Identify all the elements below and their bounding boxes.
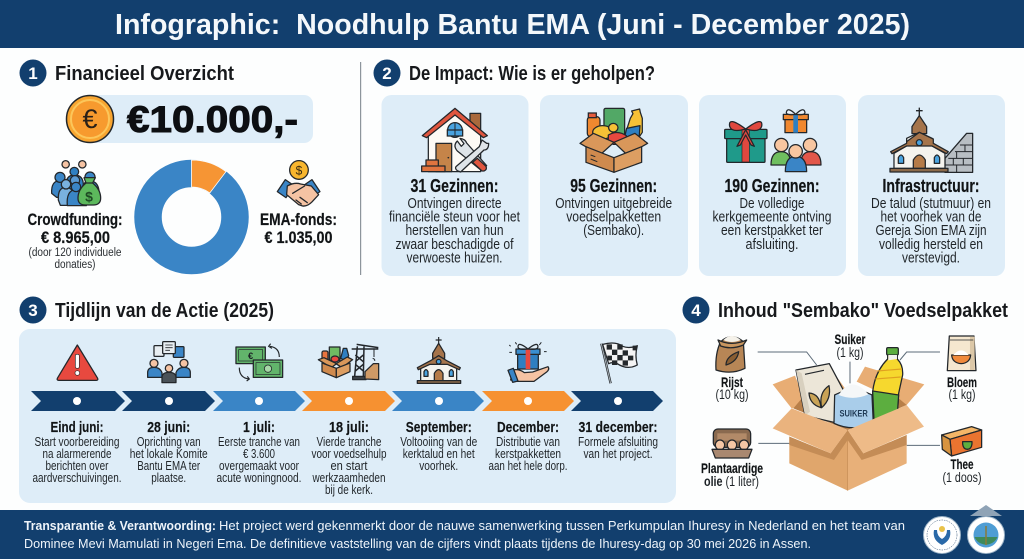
step: 28 juni: Bantu EMA ter xyxy=(137,458,201,473)
icon: food box and crane xyxy=(318,344,379,380)
item labels: olie (1 liter) xyxy=(704,473,759,489)
card text: Infrastructuur: xyxy=(882,176,980,196)
step: september xyxy=(400,419,477,473)
crowdfunding text: (door 120 individuele xyxy=(28,247,122,259)
item labels: (1 kg) xyxy=(948,386,976,402)
crowdfunding text: Crowdfunding: xyxy=(28,211,122,229)
step: december: kerstpakketten xyxy=(495,446,561,461)
icon: crowd with money bag xyxy=(52,161,101,206)
step: 1 juli: Eerste tranche van xyxy=(218,434,300,449)
section 2 heading: De Impact: Wie is er geholpen? xyxy=(409,63,655,85)
step: september: Voltooiing van de xyxy=(400,434,477,449)
icon: hand with gift xyxy=(508,342,549,382)
section 4 heading: 4 xyxy=(691,301,701,320)
icon: tea box xyxy=(942,427,982,456)
section 4 heading xyxy=(682,296,1008,324)
card: 190 gezinnen xyxy=(699,95,846,276)
EMA-fonds text: € 1.035,00 xyxy=(264,229,332,247)
step: 28 juni xyxy=(130,419,208,485)
step: eind juni xyxy=(32,419,122,485)
section 1 heading xyxy=(20,60,234,86)
step: eind juni: berichten over xyxy=(46,458,109,473)
step: 1 juli: acute woningnood. xyxy=(216,470,302,485)
logo: GPM Negeri Ema xyxy=(968,505,1004,554)
card text: Ontvingen directe xyxy=(408,195,502,212)
logo: Perkumpulan Ihuresy xyxy=(924,516,960,554)
crowdfunding text: donaties) xyxy=(54,259,96,271)
item labels: Suiker xyxy=(834,331,866,347)
step: 31 december: van het project. xyxy=(584,446,652,461)
step: september: kerktalud en het xyxy=(403,446,475,461)
panel: financieel overzicht xyxy=(20,60,337,271)
step: 31 december: 31 december: xyxy=(578,419,658,436)
item labels: Thee xyxy=(950,456,974,472)
step: september: September: xyxy=(406,419,472,436)
card text: De volledige xyxy=(740,195,804,212)
illustration: food box with items: SUIKER xyxy=(839,409,868,419)
card text: financiële steun voor het xyxy=(389,208,521,226)
step: 18 juli: bij de kerk. xyxy=(325,482,373,497)
total amount pill xyxy=(66,95,313,143)
footer text: Transparantie & Verantwoording: xyxy=(24,518,216,533)
illustration: food box with items xyxy=(712,336,982,491)
step: 1 juli: € 3.600 xyxy=(243,446,275,461)
item labels: Plantaardige xyxy=(701,460,763,476)
step: december: aan het hele dorp. xyxy=(488,458,568,473)
title: Infographic: Noodhulp Bantu EMA (Juni - December 2025) xyxy=(115,9,910,41)
card text: herstellen van hun xyxy=(406,222,504,239)
item labels: (10 kg) xyxy=(716,386,748,402)
card: infrastructuur xyxy=(858,95,1005,276)
crowdfunding text xyxy=(28,211,122,271)
card text: verstevigd. xyxy=(902,250,960,266)
icon: egg carton xyxy=(712,429,752,458)
step: 31 december xyxy=(578,419,658,461)
crowdfunding text: € 8.965,00 xyxy=(41,229,110,247)
card: 31 gezinnen xyxy=(382,95,528,276)
footer banner xyxy=(0,505,1024,559)
EMA-fonds text xyxy=(260,211,337,247)
step: september: voorhek. xyxy=(419,458,458,473)
section 3 heading xyxy=(20,296,274,324)
total amount pill: € xyxy=(82,104,98,134)
item labels: (1 kg) xyxy=(836,344,864,360)
card text: kerkgemeente ontving xyxy=(712,208,832,226)
icon: food box xyxy=(580,108,648,172)
section 3 heading: Tijdlijn van de Actie (2025) xyxy=(55,300,274,322)
step: 28 juni: 28 juni: xyxy=(147,419,190,436)
step: 1 juli: 1 juli: xyxy=(243,419,275,436)
card text: De talud (stutmuur) en xyxy=(871,195,991,212)
step: december: December: xyxy=(497,419,559,436)
icon: warning triangle xyxy=(57,345,98,380)
icon: checkered flag xyxy=(601,343,637,383)
EMA-fonds text: EMA-fonds: xyxy=(260,211,337,229)
step: december xyxy=(488,419,568,473)
icon: handshake with coin: $ xyxy=(296,163,303,177)
card: 95 gezinnen xyxy=(540,95,688,276)
step: 31 december: Formele afsluiting xyxy=(578,434,658,449)
card text xyxy=(555,176,672,239)
item labels: (1 doos) xyxy=(942,469,982,485)
item labels: Rijst xyxy=(721,374,743,390)
section 3 heading: 3 xyxy=(28,301,38,320)
card text: zwaar beschadigde of xyxy=(396,236,514,253)
timeline arrow band xyxy=(31,391,663,411)
icon: crowd with money bag: $ xyxy=(85,188,93,204)
card text: 190 Gezinnen: xyxy=(724,176,820,196)
step: 28 juni: het lokale Komite xyxy=(130,446,208,461)
step: 18 juli: en start xyxy=(330,458,368,473)
card text: Ontvingen uitgebreide xyxy=(555,195,672,212)
step: 18 juli xyxy=(312,419,386,497)
step: 18 juli: Vierde tranche xyxy=(316,434,382,449)
card text: verwoeste huizen. xyxy=(406,250,502,266)
icon: money transfer: € xyxy=(248,351,254,361)
step: eind juni: Eind juni: xyxy=(50,419,104,436)
card text xyxy=(712,176,832,253)
step: 1 juli: overgemaakt voor xyxy=(219,458,300,473)
card text: voedselpakketten xyxy=(566,208,661,226)
card text: een kerstpakket ter xyxy=(721,222,823,239)
panel: tijdlijn xyxy=(19,296,676,503)
card text: 95 Gezinnen: xyxy=(570,176,657,196)
footer text: Het project werd gekenmerkt door de nauwe samenwerking tussen Perkumpulan Ihuresy in Nederland en het team van xyxy=(219,518,905,533)
section 1 heading: 1 xyxy=(28,64,38,83)
panel: de impact xyxy=(374,60,1005,276)
card text xyxy=(389,176,521,266)
step: eind juni: Start voorbereiding xyxy=(34,434,120,449)
icon: house with tools xyxy=(422,108,489,172)
icon: rice sack xyxy=(716,336,747,372)
icon: meeting xyxy=(148,342,190,383)
icon: handshake with coin xyxy=(277,161,320,206)
item labels xyxy=(701,331,982,489)
item labels: Bloem xyxy=(947,374,977,390)
step: 18 juli: werkzaamheden xyxy=(312,470,386,485)
header banner xyxy=(0,0,1024,48)
card text: volledig hersteld en xyxy=(879,236,983,253)
section 2 heading xyxy=(374,60,655,86)
icon: church and retaining wall xyxy=(890,108,973,172)
donut chart xyxy=(148,160,235,260)
section 1 heading: Financieel Overzicht xyxy=(55,63,234,85)
step: 28 juni: Oprichting van xyxy=(137,434,201,449)
step: eind juni: na alarmerende xyxy=(42,446,112,461)
step: 28 juni: plaatse. xyxy=(151,470,186,485)
card text: Gereja Sion EMA zijn xyxy=(876,222,986,239)
step: eind juni: aardverschuivingen. xyxy=(32,470,122,485)
step: 18 juli: 18 juli: xyxy=(329,419,369,436)
icon: money transfer xyxy=(236,344,283,381)
step: 18 juli: voor voedselhulp xyxy=(312,446,386,461)
card text xyxy=(871,176,991,266)
card text: het voorhek van de xyxy=(880,208,982,226)
icon: flour bag xyxy=(947,336,976,371)
footer text: Dominee Mevi Mamulati in Negeri Ema. De definitieve vaststelling van de cijfers vindt plaats tijdens de Ihuresy-dag op 30 mei 2026 in Assen. xyxy=(24,536,811,551)
footer text xyxy=(24,518,905,551)
card text: (Sembako). xyxy=(583,222,644,239)
icon: church xyxy=(417,337,461,383)
card text: afsluiting. xyxy=(746,236,798,253)
panel: inhoud sembako xyxy=(682,296,1008,491)
step: december: Distributie van xyxy=(496,434,560,449)
step: 1 juli xyxy=(216,419,302,485)
card text: 31 Gezinnen: xyxy=(410,176,498,196)
total amount pill: €10.000,- xyxy=(127,99,298,140)
icon: gifts and family xyxy=(725,110,821,172)
section 2 heading: 2 xyxy=(382,64,392,83)
